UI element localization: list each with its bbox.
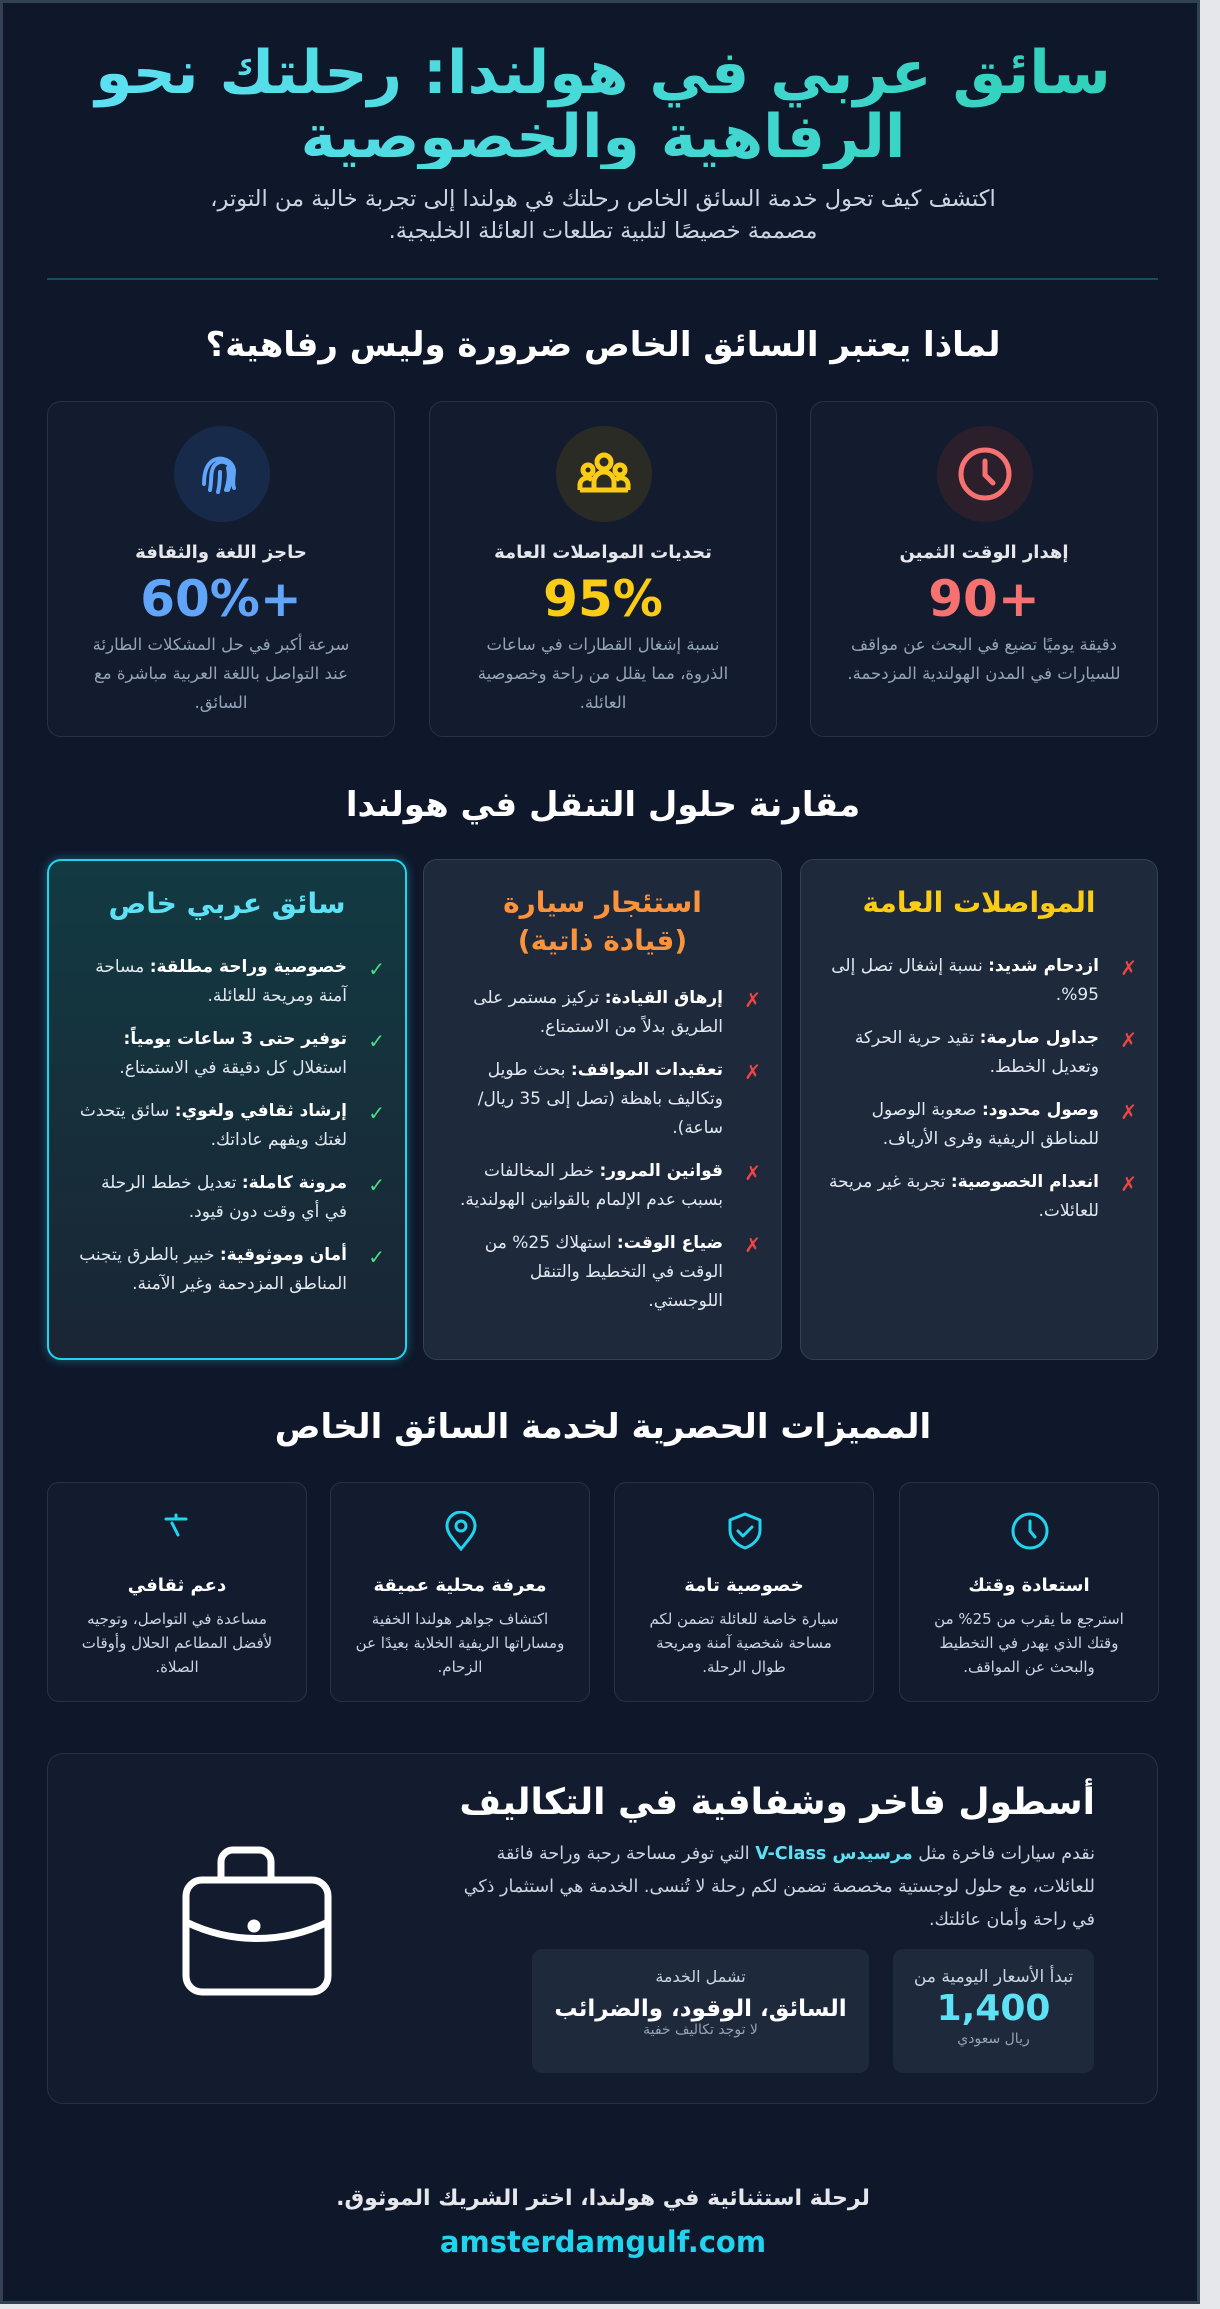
icon: people	[556, 426, 652, 522]
stat card: time: إهدار الوقت الثمين	[899, 542, 1069, 563]
comparison: private driver (highlighted): ✓	[368, 957, 385, 981]
subtitle: اكتشف كيف تحول خدمة السائق الخاص رحلتك في هولندا إلى تجربة خالية من التوتر،	[210, 186, 996, 212]
stat card: public transport	[429, 401, 777, 737]
stat card: time: دقيقة يوميًا تضيع في البحث عن مواقف للسيارات في المدن الهولندية المزدحمة.	[847, 635, 1121, 683]
fleet heading: أسطول فاخر وشفافية في التكاليف	[459, 1782, 1095, 1823]
feature: cultural: دعم ثقافي	[128, 1575, 226, 1596]
icon: fingerprint	[174, 426, 270, 522]
stat card: time	[810, 401, 1158, 737]
stat card: public transport: 95%	[543, 570, 663, 628]
footer tagline: لرحلة استثنائية في هولندا، اختر الشريك الموثوق.	[336, 2186, 870, 2211]
comparison: car rental: ضياع الوقت: استهلاك 25% من الوقت في التخطيط والتنقل اللوجستي.	[485, 1233, 723, 1311]
icon: clock	[937, 426, 1033, 522]
stat card: language: سرعة أكبر في حل المشكلات الطارئة عند التواصل باللغة العربية مباشرة مع السائق.	[93, 635, 349, 712]
fleet paragraph: نقدم سيارات فاخرة مثل مرسيدس V-Class التي توفر مساحة رحبة وراحة فائقة للعائلات، مع حلول لوجستية مخصصة تضمن لكم رحلة لا تُنسى. الخدمة هي استثمار ذكي في راحة وأمان عائلتك.	[464, 1844, 1095, 1930]
comparison: car rental: ✗	[744, 1060, 761, 1084]
service includes box: لا توجد تكاليف خفية	[643, 2022, 758, 2038]
stat card: public transport: تحديات المواصلات العامة	[494, 542, 712, 563]
stat card: language: حاجز اللغة والثقافة	[135, 542, 307, 563]
comparison: public transport: ✗	[1120, 1028, 1137, 1052]
comparison: public transport: جداول صارمة: تقيد حرية الحركة وتعديل الخطط.	[855, 1028, 1099, 1077]
comparison: public transport: انعدام الخصوصية: تجربة غير مريحة للعائلات.	[829, 1172, 1099, 1221]
comparison: car rental: (قيادة ذاتية)	[518, 924, 687, 957]
icon: briefcase	[182, 1846, 332, 1996]
stat card: time: +90	[928, 570, 1040, 628]
comparison: private driver (highlighted): ✓	[368, 1029, 385, 1053]
feature: time: استرجع ما يقرب من 25% من وقتك الذي يهدر في التخطيط والبحث عن المواقف.	[934, 1610, 1124, 1676]
heading: features: المميزات الحصرية لخدمة السائق الخاص	[275, 1407, 931, 1447]
comparison: private driver (highlighted): ✓	[368, 1245, 385, 1269]
stat card: language: +60%	[140, 570, 302, 628]
service includes box	[532, 1949, 869, 2073]
subtitle	[210, 186, 996, 244]
comparison: public transport: ✗	[1120, 1100, 1137, 1124]
stat card: public transport: نسبة إشغال القطارات في ساعات الذروة، مما يقلل من راحة وخصوصية العائلة.	[478, 635, 728, 712]
feature: local knowledge	[330, 1482, 590, 1702]
panel: fleet & pricing	[47, 1753, 1158, 2104]
comparison: public transport: ✗	[1120, 956, 1137, 980]
comparison: car rental: استئجار سيارة	[503, 886, 702, 919]
comparison: car rental: ✗	[744, 988, 761, 1012]
feature: privacy	[614, 1482, 874, 1702]
comparison: public transport	[800, 859, 1158, 1360]
feature: time: استعادة وقتك	[968, 1575, 1090, 1596]
price box	[893, 1949, 1094, 2073]
feature: local knowledge: معرفة محلية عميقة	[373, 1575, 547, 1596]
heading: why: لماذا يعتبر السائق الخاص ضرورة وليس رفاهية؟	[206, 325, 1000, 365]
comparison: car rental: ✗	[744, 1233, 761, 1257]
price box: تبدأ الأسعار اليومية من	[914, 1967, 1073, 1987]
feature: time	[899, 1482, 1159, 1702]
comparison: private driver (highlighted): إرشاد ثقافي ولغوي: سائق يتحدث لغتك ويفهم عاداتك.	[80, 1101, 347, 1150]
comparison: public transport: ازدحام شديد: نسبة إشغال تصل إلى 95%.	[831, 956, 1099, 1005]
comparison: public transport: ✗	[1120, 1172, 1137, 1196]
comparison: private driver (highlighted): أمان وموثوقية: خبير بالطرق يتجنب المناطق المزدحمة وغير الآمنة.	[79, 1245, 347, 1294]
footer url: amsterdamgulf.com	[440, 2225, 766, 2259]
price box: 1,400	[937, 1988, 1050, 2029]
comparison: private driver (highlighted): مرونة كاملة: تعديل خطط الرحلة في أي وقت دون قيود.	[101, 1173, 347, 1222]
feature: cultural	[47, 1482, 307, 1702]
feature: privacy: سيارة خاصة للعائلة تضمن لكم مساحة شخصية آمنة ومريحة طوال الرحلة.	[649, 1610, 839, 1676]
price box: ريال سعودي	[957, 2031, 1030, 2047]
comparison: public transport: المواصلات العامة	[862, 886, 1095, 919]
comparison: car rental: تعقيدات المواقف: بحث طويل وتكاليف باهظة (تصل إلى 35 ريال/ساعة).	[478, 1060, 723, 1138]
comparison: private driver (highlighted): ✓	[368, 1173, 385, 1197]
heading: comparison: مقارنة حلول التنقل في هولندا	[346, 785, 860, 825]
comparison: private driver (highlighted): توفير حتى 3 ساعات يومياً: استغلال كل دقيقة في الاستمتاع.	[119, 1029, 347, 1078]
subtitle: مصممة خصيصًا لتلبية تطلعات العائلة الخليجية.	[389, 218, 817, 244]
stat card: language	[47, 401, 395, 737]
comparison: private driver (highlighted)	[47, 859, 407, 1360]
feature: local knowledge: اكتشاف جواهر هولندا الخفية ومساراتها الريفية الخلابة بعيدًا عن الزحام.	[356, 1610, 564, 1676]
service includes box: السائق، الوقود، والضرائب	[554, 1996, 847, 2022]
comparison: public transport: وصول محدود: صعوبة الوصول للمناطق الريفية وقرى الأرياف.	[872, 1100, 1099, 1149]
feature: cultural: مساعدة في التواصل، وتوجيه لأفضل المطاعم الحلال وأوقات الصلاة.	[82, 1610, 272, 1676]
comparison: private driver (highlighted): سائق عربي خاص	[108, 887, 346, 920]
feature: privacy: خصوصية تامة	[684, 1575, 804, 1596]
comparison: private driver (highlighted): ✓	[368, 1101, 385, 1125]
comparison: car rental: قوانين المرور: خطر المخالفات بسبب عدم الإلمام بالقوانين الهولندية.	[460, 1161, 723, 1210]
comparison: private driver (highlighted): خصوصية وراحة مطلقة: مساحة آمنة ومريحة للعائلة.	[95, 957, 347, 1006]
comparison: car rental: ✗	[744, 1161, 761, 1185]
comparison: car rental: إرهاق القيادة: تركيز مستمر على الطريق بدلاً من الاستمتاع.	[473, 988, 723, 1037]
service includes box: تشمل الخدمة	[655, 1967, 746, 1986]
comparison: car rental	[423, 859, 782, 1360]
title: سائق عربي في هولندا: رحلتك نحو الرفاهية والخصوصية	[95, 38, 1111, 172]
